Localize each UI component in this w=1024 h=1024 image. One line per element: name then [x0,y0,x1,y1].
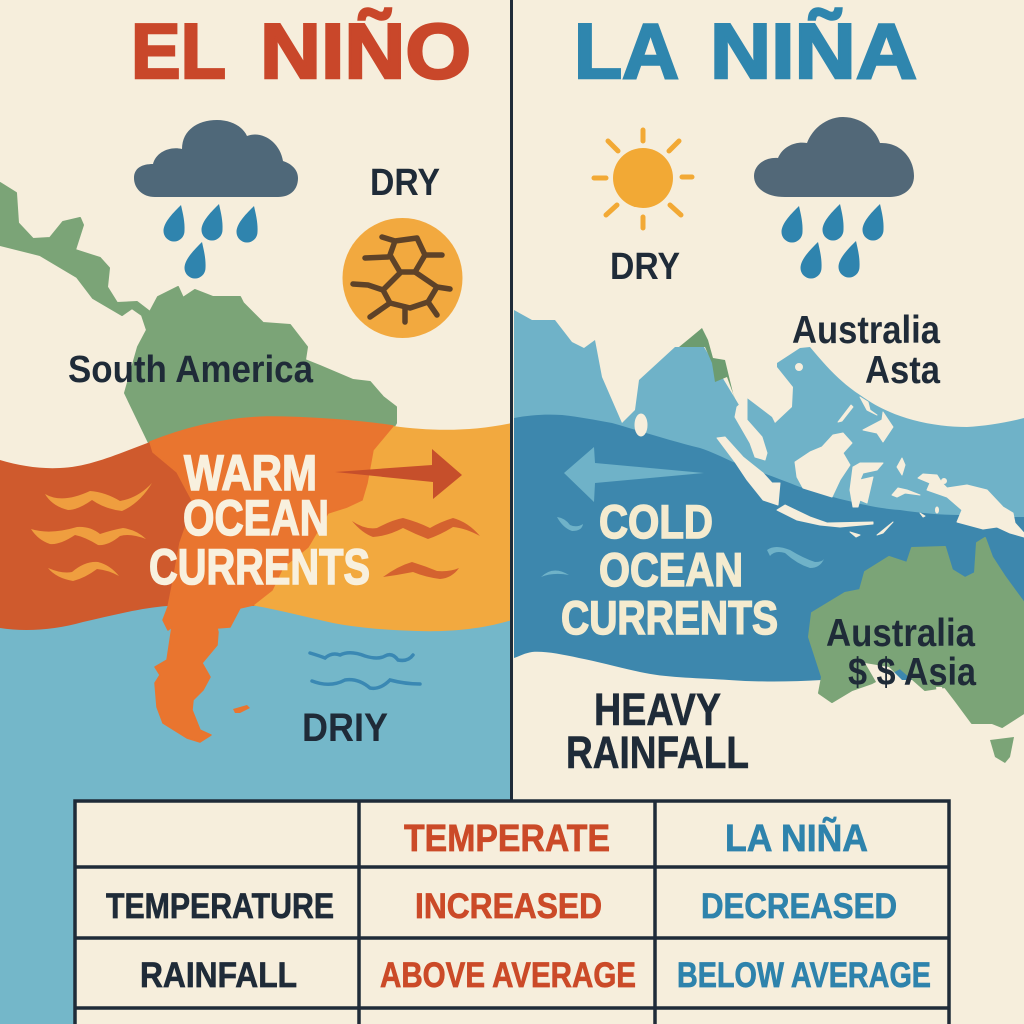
label: South America: South America [68,349,314,391]
callout: warm ocean currents: OCEAN [183,490,329,546]
comparison table [75,801,950,1024]
label: dry: DRY [370,162,440,204]
ocean: cool blue water [0,600,511,1024]
table header row: TEMPERATE [404,818,610,860]
label: heavy rainfall: HEAVY [594,684,721,735]
icon: rain cloud [134,120,298,278]
heading: La Niña: LA [574,7,679,95]
label: heavy rainfall [566,684,749,778]
waves: cold water [541,517,824,577]
label: Australia Asta: Asta [865,349,940,392]
table row: temperature: DECREASED [701,887,897,926]
map: cream islands of Southeast Asia [635,364,1024,537]
icon: sun [594,130,692,228]
icon: rain cloud [754,117,914,278]
label: dry: DRY [610,246,680,288]
label: heavy rainfall: RAINFALL [566,727,749,778]
label: Australia Asta [792,309,940,392]
panel: El Niño [0,7,512,1024]
map: green mainland sliver [679,328,738,407]
arrow: current flowing west [564,447,704,502]
map: light-blue Asian seas [514,310,1024,540]
table row: rainfall: RAINFALL [140,956,297,995]
table row: temperature: INCREASED [415,887,602,926]
heading: El Niño: EL [131,7,226,95]
table row: temperature [106,887,897,926]
table row: rainfall: BELOW AVERAGE [677,956,931,995]
warm current band: east [250,420,512,631]
label: driy: DRIY [302,706,388,750]
heading: El Niño: NIÑO [260,7,471,95]
map: Australia [809,538,1024,727]
callout: cold ocean currents: CURRENTS [561,591,778,644]
callout: cold ocean currents: OCEAN [599,543,743,596]
waves: west warm water [31,483,152,581]
callout: warm ocean currents: WARM [184,445,317,501]
table row: temperature: TEMPERATURE [106,887,334,926]
table row: rainfall [140,956,931,995]
heading: El Niño [131,7,471,95]
map: Falkland island [233,705,250,713]
waves: east warm water [352,518,480,579]
map: gulf in Australia [865,663,945,700]
map: Tasmania [990,737,1014,763]
callout: warm ocean currents [149,445,370,595]
map: Central and northern South America [0,183,396,445]
ocean: cold current band [514,415,1024,682]
label: Australia Asia: $ $ Asia [848,651,976,694]
map: South America in warm orange [150,417,393,742]
icon: cracked dry earth [342,218,462,338]
label: Australia Asia: Australia [826,612,975,655]
warm current band: west [0,420,260,630]
heading: La Niña: NIÑA [710,7,917,95]
label: Australia Asia [826,612,976,694]
table row: rainfall: ABOVE AVERAGE [380,956,636,995]
label: Australia Asta: Australia [792,309,940,352]
callout: cold ocean currents [561,495,778,644]
table header row [404,816,868,860]
waves: cool water [310,653,420,688]
callout: warm ocean currents: CURRENTS [149,539,370,595]
panel: La Niña [514,7,1024,778]
callout: cold ocean currents: COLD [599,495,713,548]
heading: La Niña [574,7,917,95]
table header row: LA NIÑA [725,816,868,860]
arrow: current flowing east [335,449,462,499]
